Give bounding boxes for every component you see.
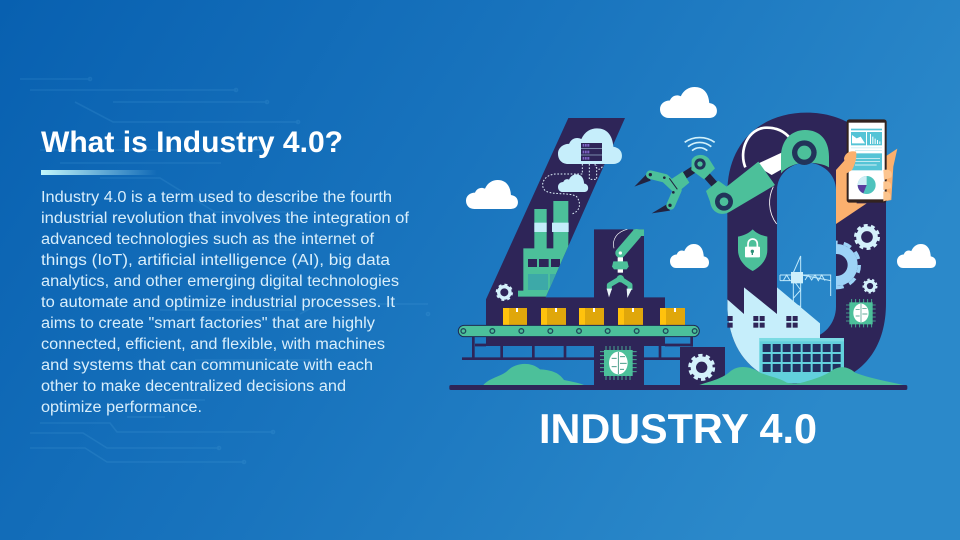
cardboard boxes [503, 308, 685, 325]
white cable loop [743, 128, 790, 167]
robot arm [682, 130, 829, 214]
glass building [759, 338, 844, 383]
gear on block [690, 355, 714, 379]
bottom caption: INDUSTRY 4.0 [539, 405, 817, 452]
factory windows [727, 316, 798, 328]
body text: connected, efficient, and flexible, with machines [41, 336, 385, 353]
illustration: numeral 0 with robot arm and phone [680, 113, 903, 385]
title: What is Industry 4.0? [41, 126, 343, 159]
dashed connectors [543, 164, 603, 214]
big gear [836, 240, 861, 290]
white clouds [466, 87, 936, 268]
factory in numeral 4 [518, 201, 569, 297]
body text: optimize performance. [41, 399, 202, 416]
title underline [41, 170, 157, 175]
numeral 4 shape [486, 118, 665, 385]
robot gripper [634, 172, 689, 213]
conveyor belt [458, 325, 699, 337]
gear top right [855, 225, 879, 249]
body text: other to make decentralized decisions and [41, 378, 346, 395]
robot claw arm on 4 [607, 229, 644, 298]
crane [780, 256, 831, 307]
small cloud [558, 174, 588, 192]
gear small [863, 279, 877, 293]
green hill left [483, 364, 584, 385]
body text: industrial revolution that involves the integration of [41, 210, 410, 227]
ground line [449, 385, 907, 390]
cloud with server [558, 128, 622, 164]
wifi icon [685, 138, 715, 151]
phone [844, 119, 897, 203]
factory silhouette [723, 287, 820, 350]
body text: aims to create "smart factories" that are highly [41, 315, 375, 332]
shield icon [738, 229, 767, 271]
body text: analytics, and other emerging digital technologies [41, 273, 399, 290]
body text: to automate and optimize industrial processes. It [41, 294, 396, 311]
body text: things (IoT), artificial intelligence (AI), big data [41, 252, 390, 269]
numeral 0 shape [727, 113, 886, 385]
thin wire [770, 187, 777, 224]
body text: advanced technologies such as the internet of [41, 231, 375, 248]
gear on numeral 4 [497, 285, 512, 300]
green hills right [699, 367, 903, 385]
body text [41, 189, 410, 416]
hand [836, 151, 867, 224]
body text: and systems that can communicate with each [41, 357, 373, 374]
illustration: numeral 4 with conveyor [449, 118, 907, 390]
chip icon right [846, 299, 876, 327]
AI chip [600, 346, 637, 380]
body text: Industry 4.0 is a term used to describe the fourth [41, 189, 392, 206]
circuit line pattern [20, 78, 430, 464]
small block with gear [680, 347, 725, 385]
conveyor frame [462, 335, 692, 359]
